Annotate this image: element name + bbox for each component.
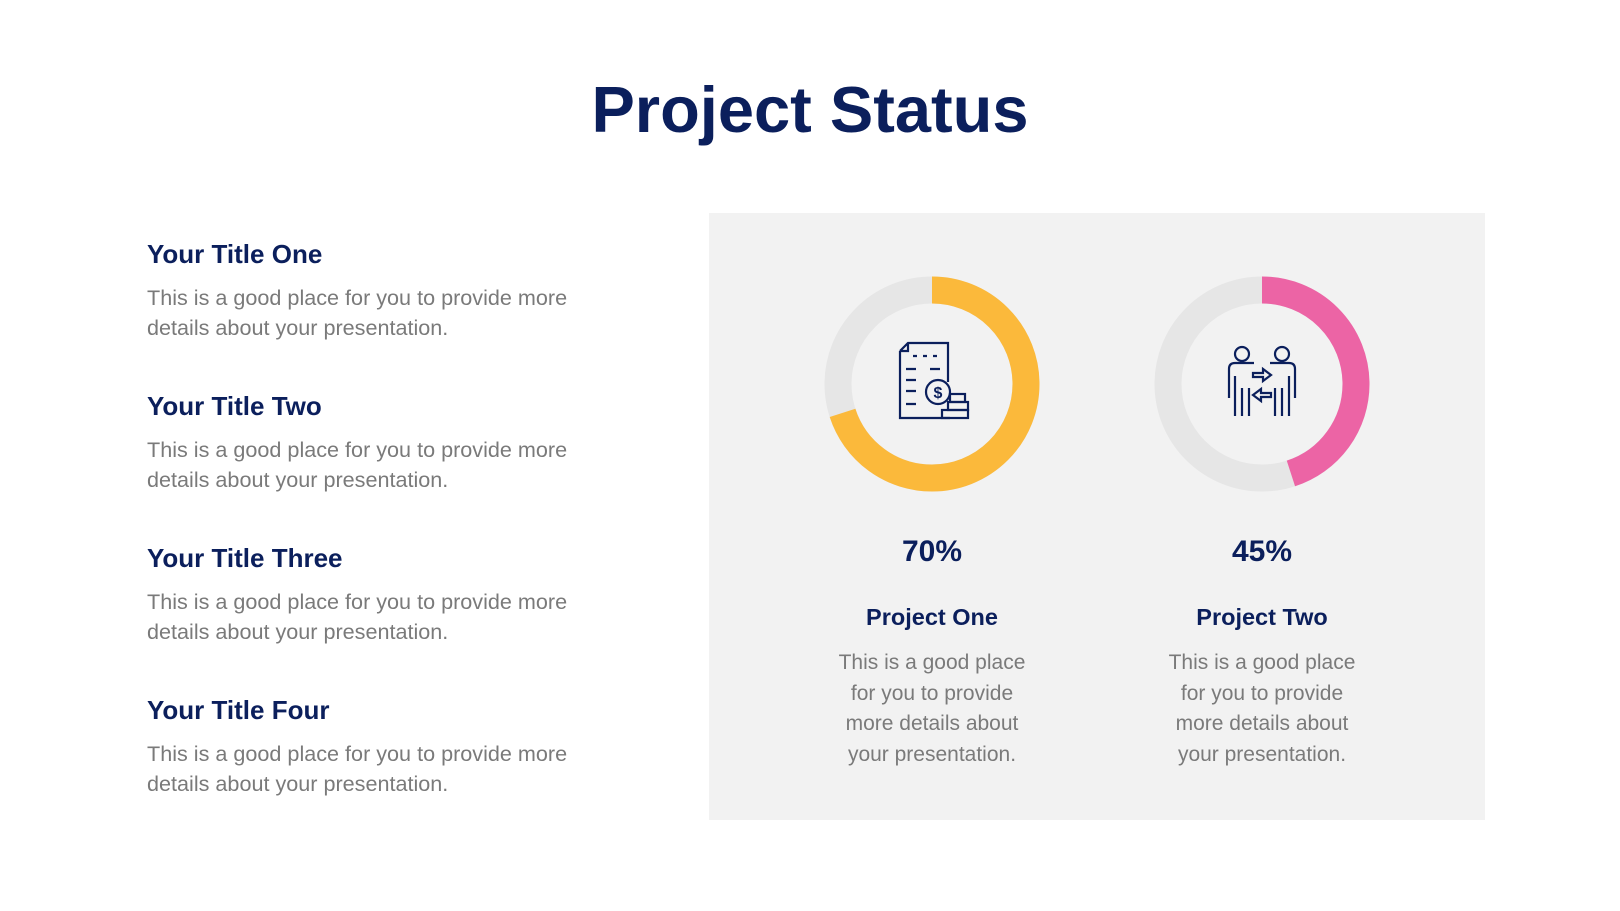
- project two text: This is a good place: [1169, 651, 1355, 674]
- item: title two: This is a good place for you to provide more details about your presentation.: [147, 437, 567, 492]
- item: title one: Your Title One: [147, 239, 322, 269]
- icon: invoice with coins: [900, 343, 968, 418]
- project one text: [839, 535, 1025, 766]
- item: title four: Your Title Four: [147, 695, 329, 725]
- project one text: This is a good place: [839, 651, 1025, 674]
- item: title four: This is a good place for you to provide more details about your presentation.: [147, 741, 567, 796]
- project one text: for you to provide: [851, 682, 1013, 704]
- item: title one: [147, 239, 567, 340]
- project two text: for you to provide: [1181, 682, 1343, 704]
- donut chart: project one 70%: [824, 276, 1040, 492]
- icon: people exchange: [1229, 347, 1295, 416]
- title: Project Status: [591, 73, 1029, 146]
- project one text: more details about: [846, 712, 1018, 735]
- project two text: more details about: [1176, 712, 1348, 735]
- item: title three: [147, 543, 567, 644]
- panel: projects: [709, 213, 1485, 820]
- project one text: 70%: [902, 535, 962, 568]
- project two text: [1169, 535, 1355, 766]
- project two text: Project Two: [1196, 604, 1328, 630]
- item: title one: This is a good place for you to provide more details about your presentation.: [147, 285, 567, 340]
- item: title two: [147, 391, 567, 492]
- item: title three: Your Title Three: [147, 543, 343, 573]
- item: title four: [147, 695, 567, 796]
- item: title two: Your Title Two: [147, 391, 322, 421]
- project one text: your presentation.: [848, 742, 1016, 766]
- project one text: Project One: [866, 604, 998, 630]
- icon: invoice with coins: $: [934, 385, 943, 402]
- project two text: your presentation.: [1178, 742, 1346, 766]
- donut chart: project two 45%: [1154, 276, 1370, 492]
- item: title three: This is a good place for you to provide more details about your presentation.: [147, 589, 567, 644]
- project two text: 45%: [1232, 535, 1292, 568]
